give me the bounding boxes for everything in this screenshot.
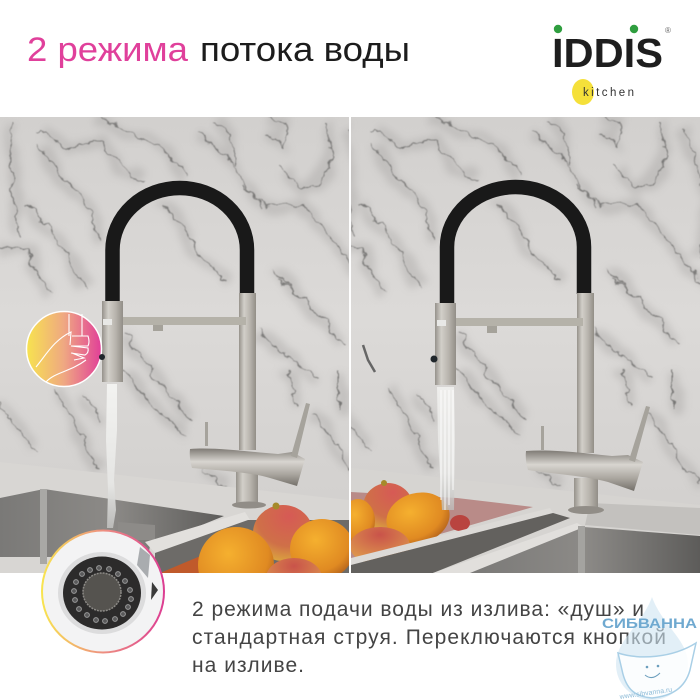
brand logo: IDDIS kitchen	[552, 25, 671, 105]
description text	[192, 598, 666, 677]
inset: aerator close-up	[41, 530, 165, 654]
spray head	[435, 303, 456, 385]
handle	[629, 406, 650, 462]
countertop right	[352, 517, 700, 573]
spray nozzles ring	[72, 566, 133, 623]
filter lever	[541, 426, 544, 450]
horizontal arm	[120, 317, 246, 325]
base	[236, 471, 258, 505]
description text: на изливе.	[192, 654, 304, 677]
tray interior right	[351, 492, 533, 560]
title: 2 режима	[27, 31, 188, 69]
watermark: Sibvanna	[602, 597, 697, 700]
title	[27, 31, 410, 69]
handle	[291, 403, 310, 458]
description text: 2 режима подачи воды из излива: «душ» и	[192, 598, 644, 621]
brand logo: IDDIS kitchen: kitchen	[583, 87, 634, 99]
shower water right	[437, 387, 455, 510]
vertical column	[577, 293, 594, 453]
brand logo: IDDIS kitchen: IDDIS	[552, 30, 663, 76]
description text: стандартная струя. Переключаются кнопкой	[192, 626, 666, 649]
watermark: Sibvanna: СИБВАННА	[602, 616, 697, 631]
filter lever	[205, 422, 208, 446]
marble wall left	[0, 117, 349, 500]
fruit bowl left	[198, 502, 349, 573]
vertical column	[239, 293, 256, 450]
water stream left	[106, 384, 117, 528]
base	[574, 478, 598, 510]
marble wall right	[334, 116, 700, 517]
sink left	[0, 489, 349, 573]
countertop left	[0, 462, 349, 573]
horizontal arm	[455, 318, 583, 326]
central mesh	[83, 573, 121, 611]
title: потока воды	[200, 31, 410, 69]
panel: right photo, shower mode	[334, 116, 700, 573]
fruit bowl right	[351, 480, 470, 562]
panel: left photo, stream mode	[0, 117, 349, 573]
flexible hose	[447, 187, 584, 304]
sink right	[351, 508, 700, 573]
body	[526, 451, 643, 491]
faucet left	[102, 188, 310, 508]
icon: hand pressing button	[26, 312, 105, 386]
flexible hose	[112, 188, 247, 302]
spray head	[102, 301, 123, 382]
faucet right	[430, 187, 650, 514]
brand logo: IDDIS kitchen: ®	[665, 26, 671, 35]
body	[190, 449, 305, 486]
